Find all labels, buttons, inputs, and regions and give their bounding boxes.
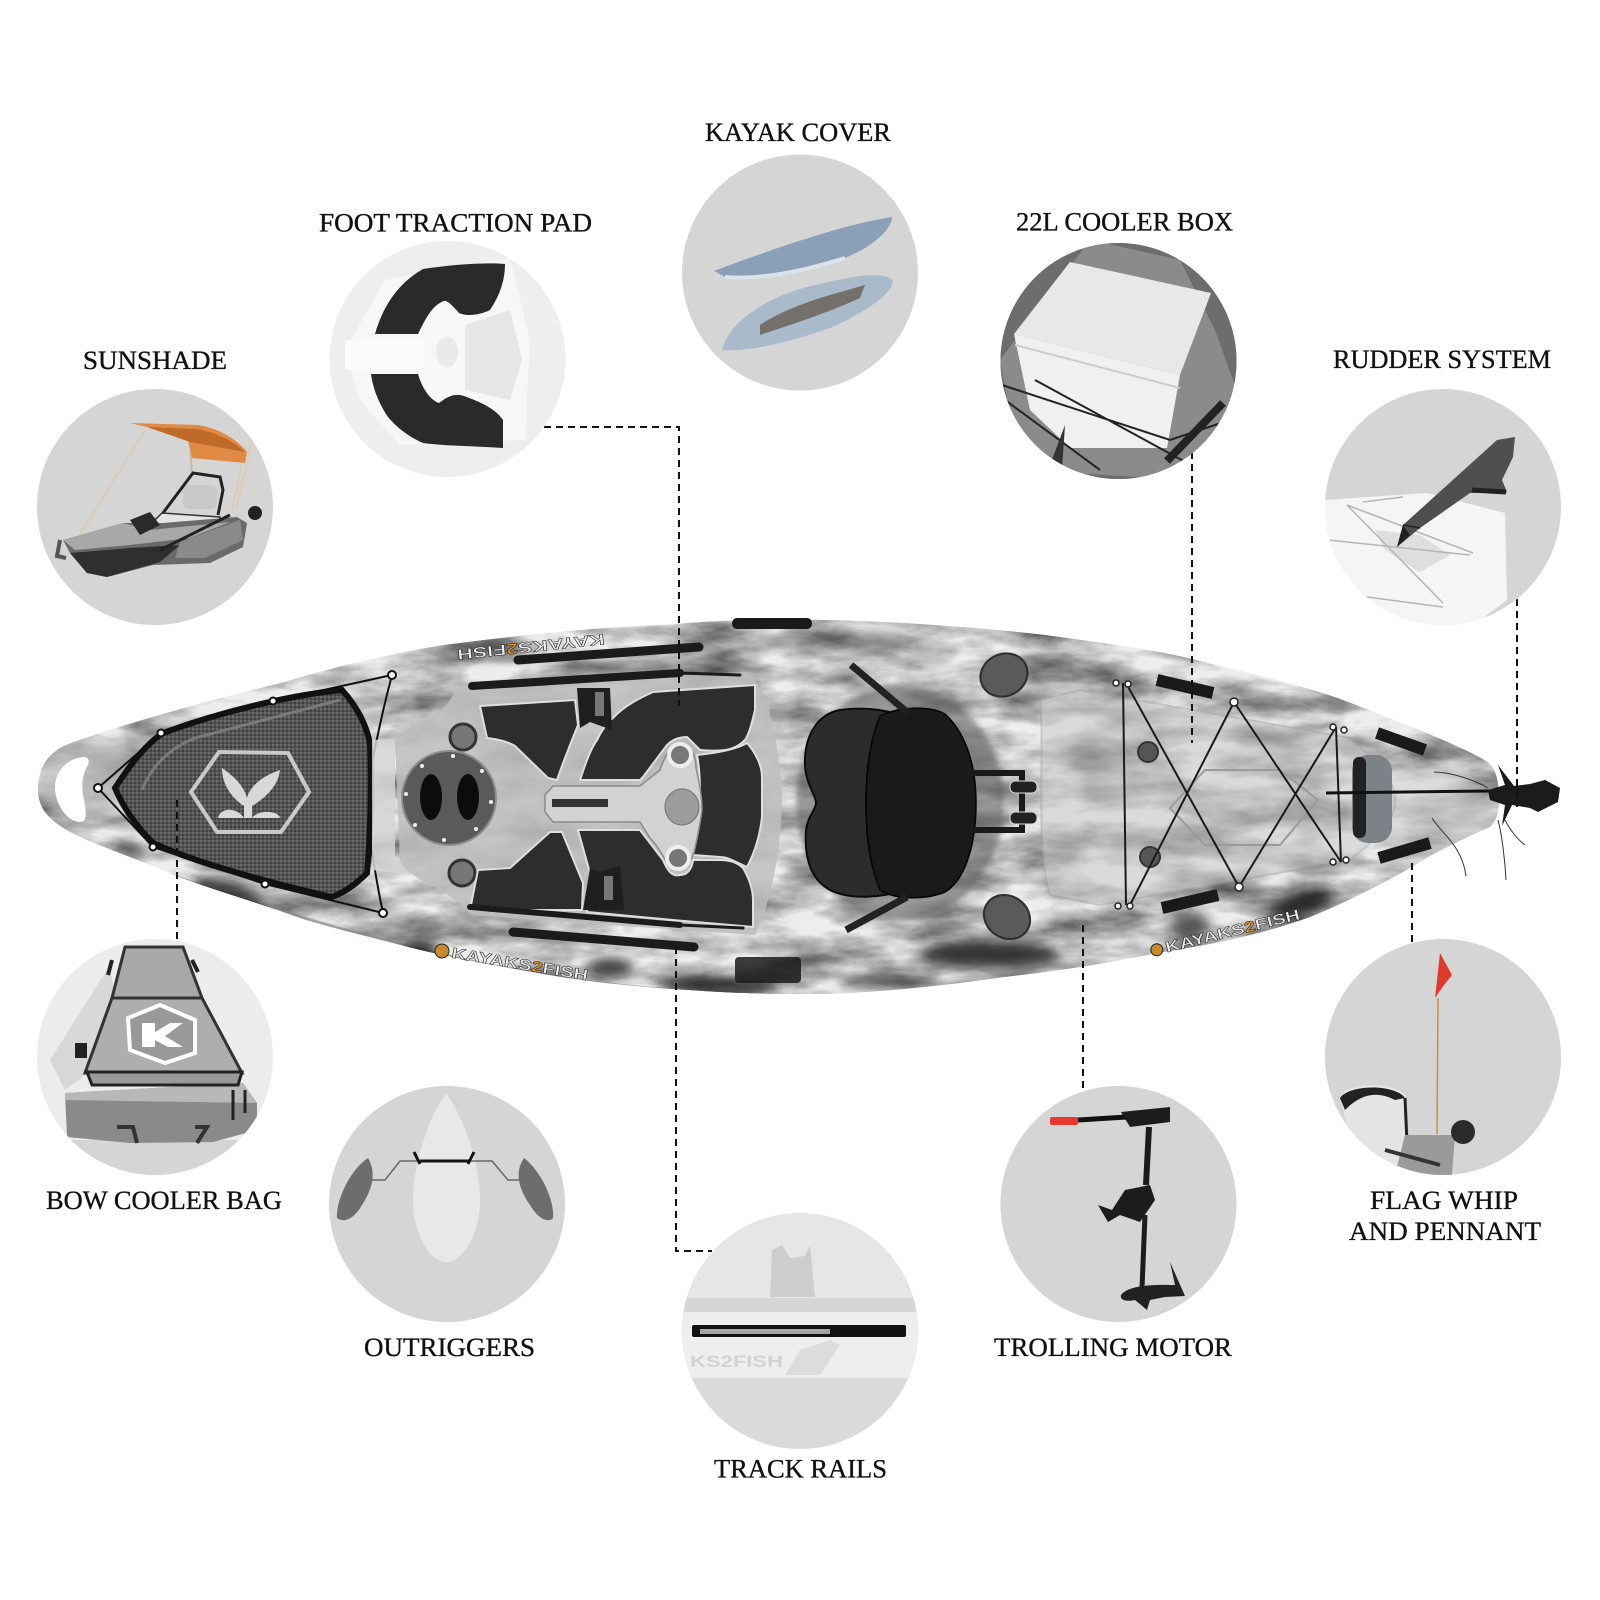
center console bbox=[545, 743, 702, 869]
carry handles bbox=[732, 618, 812, 983]
panel: kayak cover bbox=[682, 154, 918, 390]
front bulkhead bbox=[372, 738, 410, 875]
scupper plugs bbox=[449, 724, 476, 886]
label: foot traction pad: FOOT TRACTION PAD bbox=[319, 208, 592, 238]
icon: trolling motor bbox=[1050, 1107, 1185, 1310]
panel: track rails bbox=[682, 1210, 920, 1449]
panel: trolling motor bbox=[1000, 1086, 1236, 1322]
connector: flag whip bbox=[1411, 863, 1413, 943]
panel: 22L cooler box bbox=[1000, 240, 1240, 480]
connector: track rails bbox=[676, 947, 712, 1251]
bow mesh net bbox=[94, 671, 396, 917]
seat bbox=[805, 665, 1037, 930]
stern deck fittings bbox=[1138, 742, 1160, 867]
stern handle bbox=[1352, 755, 1392, 843]
rudder assembly bbox=[1326, 765, 1560, 880]
icon: traction pads bbox=[345, 258, 530, 448]
icon: outriggers with kayak bbox=[337, 1094, 553, 1262]
icon: flag and seat bbox=[1340, 953, 1475, 1175]
hull body bbox=[30, 610, 1510, 1003]
hull decal: bottom right: KAYAKS 2FISH bbox=[1164, 906, 1302, 956]
icon: kayak with canopy bbox=[57, 423, 262, 577]
label: track rails: TRACK RAILS bbox=[714, 1454, 887, 1484]
paddle holder plates bbox=[973, 646, 1039, 948]
panel: sunshade bbox=[37, 389, 273, 625]
stern hexagon emblem bbox=[1170, 770, 1318, 845]
hull decal: top mirrored: KAYAKS2FISH bbox=[456, 630, 605, 662]
deck rail mounts bbox=[1157, 680, 1430, 908]
label: flag whip and pennant: FLAG WHIP bbox=[1370, 1185, 1518, 1215]
label: outriggers: OUTRIGGERS bbox=[364, 1332, 535, 1362]
connector: bow cooler bag bbox=[176, 800, 178, 941]
icon: track rail on hull: KS2FISH bbox=[690, 1352, 783, 1371]
cockpit recess bbox=[395, 672, 782, 935]
icon: covered kayaks bbox=[714, 217, 893, 350]
bow carry handle bbox=[55, 757, 89, 822]
hull decal: bottom left: KAYAKS 2FISH bbox=[450, 945, 589, 984]
panel: flag whip bbox=[1325, 939, 1561, 1175]
panel: rudder system bbox=[1325, 389, 1561, 630]
label: 22L cooler box: 22L COOLER BOX bbox=[1016, 206, 1233, 236]
connector: trolling motor bbox=[1082, 925, 1084, 1091]
traction pads bbox=[470, 685, 762, 927]
track rails on deck bbox=[470, 647, 743, 947]
front hatch bbox=[402, 751, 496, 845]
label: trolling motor: TROLLING MOTOR bbox=[994, 1332, 1232, 1362]
label: flag whip and pennant bbox=[1349, 1185, 1541, 1246]
kayak top view bbox=[30, 610, 1560, 1003]
label: flag whip and pennant: AND PENNANT bbox=[1349, 1216, 1541, 1246]
foot pegs bbox=[577, 688, 624, 910]
connector: rudder bbox=[1516, 599, 1518, 807]
seat well bbox=[796, 685, 1004, 921]
icon: whale tail hexagon logo bbox=[191, 752, 309, 832]
label: bow cooler bag: BOW COOLER BAG bbox=[46, 1185, 282, 1215]
label: sunshade: SUNSHADE bbox=[83, 345, 227, 375]
icon: track rail on hull bbox=[682, 1210, 920, 1378]
connector: foot traction pad bbox=[544, 427, 679, 706]
stern deck recess bbox=[1040, 690, 1395, 905]
icon: cooler bag bbox=[50, 947, 260, 1180]
label: rudder system: RUDDER SYSTEM bbox=[1333, 344, 1551, 374]
icon: cooler box bbox=[1000, 240, 1240, 480]
bungee cords bbox=[1123, 683, 1341, 905]
label: kayak cover: KAYAK COVER bbox=[705, 117, 891, 147]
panel: bow cooler bag bbox=[37, 939, 273, 1180]
connector: cooler box bbox=[1191, 452, 1193, 743]
panel: outriggers bbox=[329, 1086, 565, 1322]
icon: rudder on stern bbox=[1325, 437, 1515, 630]
panel: foot traction pad bbox=[330, 241, 566, 477]
